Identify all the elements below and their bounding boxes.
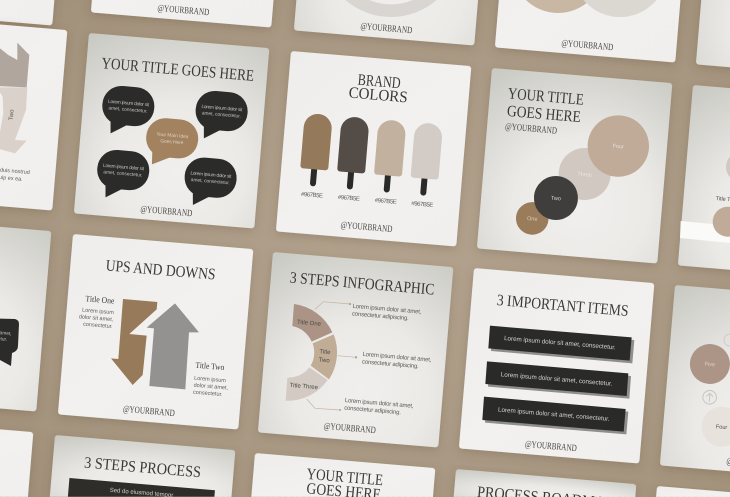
circle four xyxy=(585,113,651,179)
card background xyxy=(91,0,286,28)
panel: right edge card xyxy=(671,84,730,281)
title: YOUR TITLE xyxy=(507,85,584,109)
circle four: Four xyxy=(716,424,728,431)
label: title two: dolor sit amet, xyxy=(193,383,229,392)
cycle arrows xyxy=(0,43,29,153)
panel: 3 steps process xyxy=(50,435,235,497)
brand handle: @YOURBRAND xyxy=(140,205,193,219)
semicircle chart xyxy=(286,302,357,411)
icon: up arrow xyxy=(702,390,717,405)
step two text xyxy=(362,352,432,371)
label: title two xyxy=(193,360,231,399)
card background xyxy=(50,435,235,497)
card background xyxy=(74,33,269,229)
panel: 3 important items xyxy=(459,268,654,464)
label: title one: Title One xyxy=(85,293,115,306)
title: GOES HERE xyxy=(506,103,581,126)
popsicle swatch one xyxy=(298,113,333,200)
segment labels: Title One xyxy=(297,320,322,328)
panel: left edge card with bubble xyxy=(0,216,51,412)
bubble four: Lorem ipsum dolor sit xyxy=(190,170,232,180)
card background xyxy=(477,68,672,264)
label: title one xyxy=(78,293,116,330)
label: title one: Lorem ipsum xyxy=(82,308,114,316)
brand handle: @YOURBRAND xyxy=(122,405,175,419)
title: 3 STEPS PROCESS xyxy=(84,455,202,481)
circle two: Two xyxy=(551,196,561,202)
popsicle swatch four xyxy=(408,122,443,209)
segment labels xyxy=(289,320,334,392)
circle one: One xyxy=(527,216,538,223)
bubble four: amet, consectetur. xyxy=(191,177,230,186)
card background xyxy=(454,469,636,497)
panel: growing circles xyxy=(477,68,672,264)
partial bubble xyxy=(0,318,19,366)
title: UPS AND DOWNS xyxy=(105,257,216,284)
label: title two: Title Two xyxy=(195,360,225,372)
label: title one: consectetur. xyxy=(83,322,113,330)
label: title two: consectetur. xyxy=(193,390,223,398)
bubble three xyxy=(95,148,151,201)
ring chart xyxy=(328,0,454,11)
small outlined circle xyxy=(724,334,730,346)
popsicle swatch four: #967B5E xyxy=(411,201,433,209)
panel: process roadmap xyxy=(453,469,636,497)
label: title two: Lorem ipsum xyxy=(194,376,226,384)
step two text: consectetur adipiscing. xyxy=(362,359,419,370)
popsicle swatch one: #967B5E xyxy=(301,192,323,200)
title: YOUR TITLE GOES HERE xyxy=(101,55,255,85)
panel: speech bubbles xyxy=(74,33,269,229)
bar three xyxy=(479,384,631,447)
bubble three: amet, consectetur. xyxy=(103,169,143,179)
panel: top card with brand xyxy=(91,0,286,28)
brand handle: @YOURBRAND xyxy=(505,122,557,137)
circle three: Three xyxy=(577,172,592,179)
card background xyxy=(660,285,730,481)
card background xyxy=(459,268,654,464)
bubble one: amet, consectetur. xyxy=(108,105,148,115)
center bubble: Your Main Idea xyxy=(156,132,189,140)
card background xyxy=(294,0,489,46)
brand handle: @YOURBRAND xyxy=(360,22,413,36)
title: COLORS xyxy=(348,85,408,106)
bar one: Lorem ipsum dolor sit amet, consectetur. xyxy=(504,335,616,351)
partial bubble text xyxy=(0,329,12,343)
step one text: Lorem ipsum dolor sit amet, xyxy=(352,304,422,316)
panel: brand colors xyxy=(276,51,471,247)
circle five xyxy=(688,342,730,386)
overlapping circles xyxy=(512,0,668,17)
label: title one: dolor sit amet, xyxy=(79,314,114,323)
segment labels: Title Three xyxy=(289,383,319,391)
step one text xyxy=(352,304,422,323)
bubble four xyxy=(182,156,238,208)
partial diagram xyxy=(680,152,730,244)
circle four: Four xyxy=(612,144,624,151)
circle four xyxy=(700,405,730,448)
bar one xyxy=(485,313,637,376)
title: 3 IMPORTANT ITEMS xyxy=(496,292,629,320)
bubble two: amet, consectetur. xyxy=(202,110,241,120)
card background xyxy=(276,51,471,247)
center bubble: Goes Here xyxy=(160,138,184,146)
popsicle swatch two: #967B5E xyxy=(338,195,360,203)
panel: top-right edge card xyxy=(696,0,730,80)
title: 3 STEPS INFOGRAPHIC xyxy=(289,270,435,299)
segment labels: Two xyxy=(318,358,331,364)
brand handle: @YOURBRAND xyxy=(157,4,210,18)
title xyxy=(348,71,409,106)
popsicle swatch two xyxy=(335,116,370,203)
card background xyxy=(678,85,730,281)
panel: ups and downs xyxy=(58,234,253,430)
bar three: Lorem ipsum dolor sit amet, consectetur. xyxy=(498,407,610,423)
circle two xyxy=(532,174,580,222)
brand handle: @YOURBRAND xyxy=(561,39,614,53)
bubble two xyxy=(193,89,249,142)
card background xyxy=(251,453,435,497)
card background xyxy=(495,0,690,63)
panel: bottom-right edge card xyxy=(656,486,730,497)
brand handle: @YOURBRAND xyxy=(524,440,577,454)
circle five: Five xyxy=(704,362,715,368)
title xyxy=(305,466,384,497)
description text xyxy=(0,167,30,183)
step one text: consectetur adipiscing. xyxy=(352,311,409,322)
panel: top ring card xyxy=(294,0,489,46)
panel: 3 steps infographic xyxy=(258,252,453,448)
bar two xyxy=(482,349,634,411)
circle one xyxy=(515,201,550,236)
brand handle: @YOURBRAND xyxy=(340,221,393,235)
brand handle: @YOURBRAND xyxy=(323,422,376,436)
bubble one: Lorem ipsum dolor sit xyxy=(108,99,150,108)
arrow: down xyxy=(111,299,157,385)
step two text: Lorem ipsum dolor sit amet, xyxy=(362,352,432,364)
title xyxy=(506,85,584,126)
title: BRAND xyxy=(357,72,401,92)
card background xyxy=(0,216,51,412)
panel: left cycle card xyxy=(0,15,67,211)
bubble one xyxy=(100,84,156,137)
popsicle swatch three xyxy=(371,119,407,206)
card background xyxy=(0,15,67,211)
panel: bottom-left edge card xyxy=(0,417,33,497)
bubble three: Lorem ipsum dolor sit xyxy=(103,163,145,172)
arrow: up xyxy=(147,303,199,389)
cycle arrows: Two xyxy=(9,109,16,121)
card background xyxy=(258,252,453,448)
dark step box xyxy=(68,478,215,497)
description text: duis nostrud xyxy=(0,168,30,176)
circle three xyxy=(557,146,613,202)
step three text xyxy=(344,398,414,417)
bubble two: Lorem ipsum dolor sit xyxy=(201,104,243,113)
panel: top overlapping circles card xyxy=(495,0,690,63)
title: YOUR TITLE xyxy=(306,466,384,489)
bar two: Lorem ipsum dolor sit amet, consectetur. xyxy=(500,371,613,388)
panel: bottom title card xyxy=(251,453,435,497)
segment labels: Title xyxy=(319,349,331,356)
popsicle swatch three: #967B5E xyxy=(374,198,397,206)
center bubble xyxy=(144,117,200,168)
panel: top-left edge card xyxy=(0,0,67,26)
card background xyxy=(58,234,253,430)
panel: right edge process card xyxy=(660,285,730,481)
step three text: consectetur adipiscing. xyxy=(344,406,402,416)
step three text: Lorem ipsum dolor sit amet, xyxy=(345,398,414,410)
